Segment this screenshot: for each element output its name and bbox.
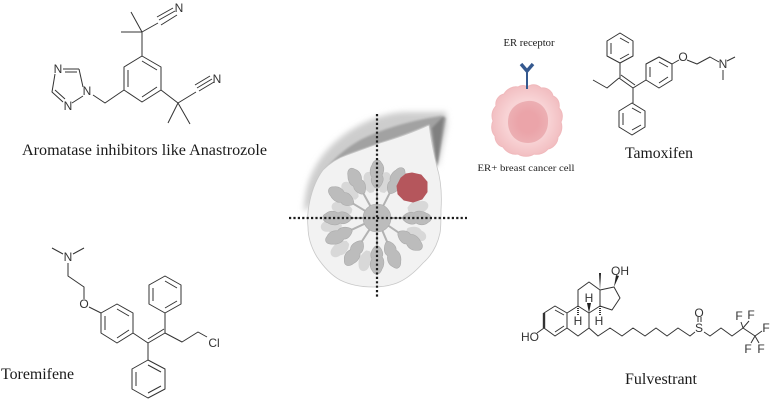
- illustration: breast with tumor: [289, 112, 467, 298]
- caption: anastrozole: Aromatase inhibitors like Anastrozole: [22, 142, 267, 159]
- structure: fulvestrant: F: [747, 308, 755, 322]
- receptor label: ER receptor: [504, 38, 555, 49]
- structure: fulvestrant: H: [574, 314, 582, 328]
- structure: toremifene: O: [79, 297, 89, 311]
- structure: tamoxifen: N: [719, 57, 727, 71]
- caption: fulvestrant: Fulvestrant: [625, 371, 698, 388]
- structure: fulvestrant: O: [694, 306, 704, 320]
- caption: toremifene: Toremifene: [1, 366, 74, 383]
- structure: anastrozole: N: [64, 99, 72, 113]
- structure: anastrozole: N: [175, 1, 183, 15]
- structure: fulvestrant: HO: [521, 330, 539, 344]
- dotted axes: [289, 114, 467, 298]
- structure: anastrozole: N: [83, 84, 91, 98]
- structure: fulvestrant: F: [762, 321, 770, 335]
- structure: tamoxifen: O: [678, 50, 688, 64]
- structure: fulvestrant: [521, 264, 770, 356]
- structure: fulvestrant: H: [585, 291, 593, 305]
- cell label: ER+ breast cancer cell: [478, 164, 575, 174]
- nucleus: [508, 101, 548, 143]
- structure: anastrozole: N: [213, 72, 221, 86]
- structure: anastrozole: N: [54, 62, 62, 76]
- cell body: [492, 85, 562, 156]
- illustration: ER+ breast cancer cell: [478, 38, 575, 174]
- structure: toremifene: Cl: [208, 336, 220, 350]
- receptor: [521, 64, 533, 89]
- skin shadow: [304, 112, 447, 212]
- breast outline: [308, 125, 441, 287]
- structure: toremifene: N: [64, 250, 72, 264]
- wedge bonds: [587, 273, 619, 313]
- structure: anastrozole: [52, 1, 221, 124]
- structure: fulvestrant: OH: [611, 264, 629, 278]
- structure: fulvestrant: S: [695, 321, 703, 335]
- lobes: [320, 171, 430, 273]
- structure: toremifene: [52, 248, 220, 398]
- structure: fulvestrant: F: [735, 309, 743, 323]
- structure: tamoxifen: [593, 33, 735, 135]
- caption: tamoxifen: Tamoxifen: [625, 145, 693, 162]
- structure: fulvestrant: H: [595, 314, 603, 328]
- structure: fulvestrant: F: [757, 342, 765, 356]
- tumor: [397, 173, 427, 202]
- structure: fulvestrant: F: [744, 342, 752, 356]
